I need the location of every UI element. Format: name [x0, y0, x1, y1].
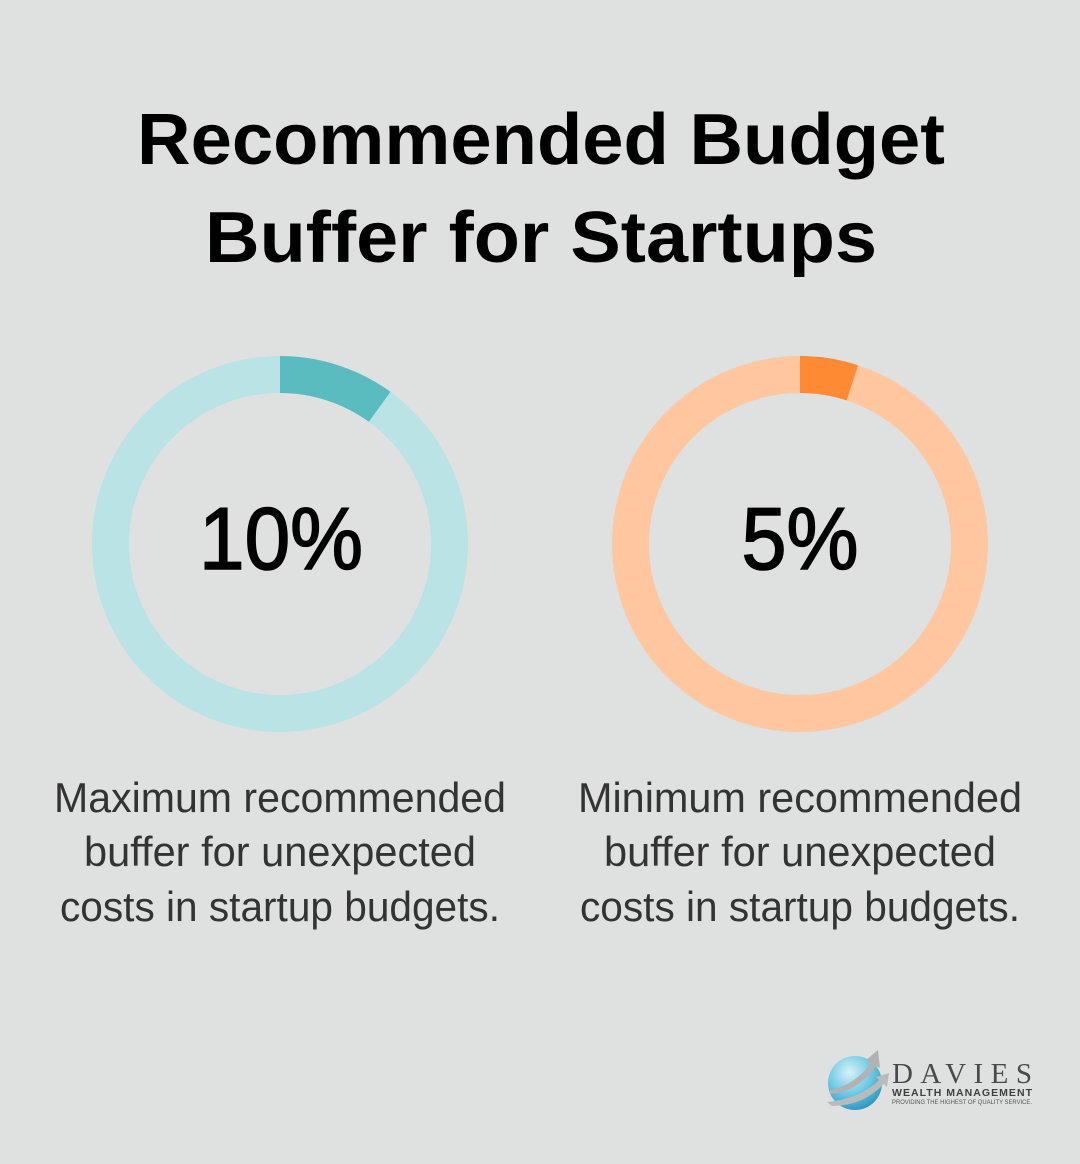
title — [137, 100, 945, 278]
icon: globe with arrows — [827, 1050, 889, 1110]
tagline: PROVIDING THE HIGHEST OF QUALITY SERVICE. — [892, 1099, 1032, 1106]
donut chart: 5% — [630, 356, 970, 714]
title: Recommended Budget — [137, 100, 945, 180]
description: maximum buffer — [54, 774, 506, 930]
value: 10%: 10% — [199, 489, 363, 588]
wordmark: DAVIES — [892, 1058, 1032, 1090]
panel: minimum buffer — [578, 356, 1022, 930]
description: minimum buffer: buffer for unexpected — [604, 828, 996, 875]
description: minimum buffer — [578, 774, 1022, 930]
panel: maximum buffer — [54, 356, 506, 930]
value: 5%: 5% — [742, 489, 858, 588]
wordmark subtitle: WEALTH MANAGEMENT — [892, 1087, 1033, 1099]
description: maximum buffer: buffer for unexpected — [84, 828, 476, 875]
logo: Davies Wealth Management — [827, 1050, 1033, 1110]
description: maximum buffer: costs in startup budgets. — [60, 883, 500, 930]
description: minimum buffer: costs in startup budgets. — [580, 883, 1020, 930]
description: maximum buffer: Maximum recommended — [54, 774, 506, 821]
title: Buffer for Startups — [205, 198, 877, 278]
description: minimum buffer: Minimum recommended — [578, 774, 1022, 821]
donut chart: 10% — [110, 356, 450, 714]
